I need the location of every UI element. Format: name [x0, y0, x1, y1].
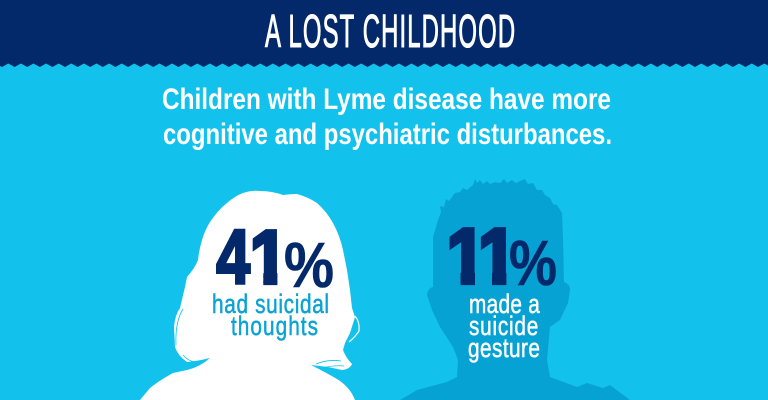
header band — [0, 0, 768, 68]
stat: 11%: % — [509, 227, 557, 299]
stat: 11%: 1 — [478, 212, 517, 300]
stat: 41%: % — [284, 229, 334, 301]
label: had suicidal thoughts: had suicidal — [212, 289, 329, 320]
label: made a suicide gesture: suicide — [469, 311, 538, 342]
label: had suicidal thoughts: thoughts — [231, 311, 318, 342]
subtitle: Children with Lyme disease have more — [162, 83, 611, 116]
icon: boy silhouette — [400, 179, 630, 400]
subtitle: cognitive and psychiatric disturbances. — [163, 118, 612, 151]
label: had suicidal thoughts — [212, 289, 329, 342]
stat: 41% — [216, 228, 333, 288]
stat: 41%: 1 — [250, 216, 288, 300]
stat: 11% — [450, 227, 556, 286]
label: made a suicide gesture: made a — [469, 289, 540, 320]
label: made a suicide gesture — [468, 289, 540, 364]
stat: 11%: 1 — [447, 212, 486, 300]
title: A LOST CHILDHOOD — [265, 6, 515, 57]
panel: girl silhouette with 41% — [140, 191, 359, 400]
icon: girl silhouette — [140, 191, 359, 400]
label: made a suicide gesture: gesture — [468, 333, 540, 364]
subtitle — [162, 83, 612, 151]
stat: 41%: 4 — [216, 214, 250, 300]
panel: boy silhouette with 11% — [400, 179, 630, 400]
